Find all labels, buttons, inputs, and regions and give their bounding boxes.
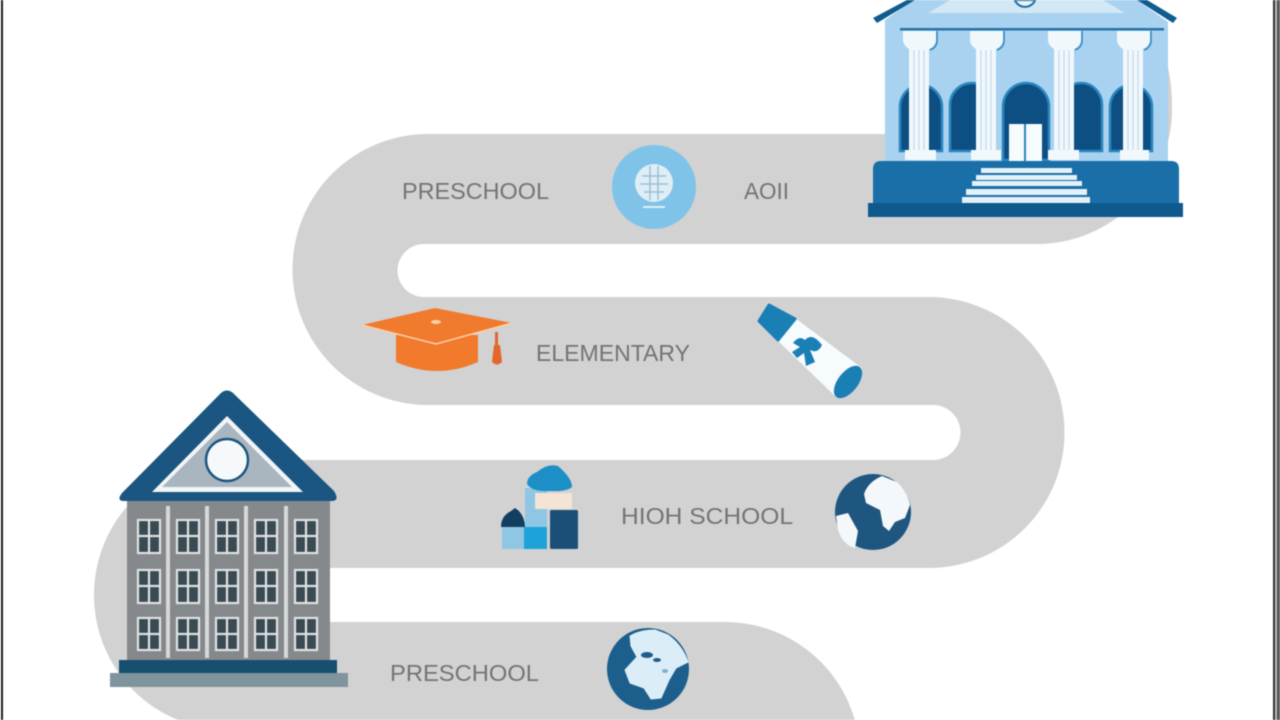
school building	[110, 390, 348, 687]
university wall	[885, 0, 1168, 165]
winding road path	[94, 67, 1172, 720]
school base	[110, 660, 348, 687]
icon: dark globe right	[835, 474, 911, 550]
university building	[868, 0, 1183, 217]
high school label: HIOH SCHOOL	[621, 503, 793, 529]
icon: orange graduation cap	[362, 308, 512, 371]
university arches	[900, 83, 1152, 160]
preschool label bottom: PRESCHOOL	[390, 660, 539, 686]
school body	[127, 500, 330, 660]
university pediment	[873, 0, 1177, 30]
icon: stacked blocks	[501, 465, 578, 549]
icon: diploma scroll	[759, 305, 868, 403]
elementary label: ELEMENTARY	[536, 340, 690, 366]
university columns	[903, 31, 1151, 160]
aoii label: AOII	[744, 178, 789, 204]
school pilasters	[166, 506, 288, 658]
icon: light blue globe badge	[612, 145, 696, 229]
preschool label top: PRESCHOOL	[402, 178, 549, 204]
icon: dark globe bottom	[607, 628, 689, 710]
university steps	[962, 168, 1090, 203]
university podium	[868, 161, 1183, 217]
school windows	[138, 520, 317, 650]
school roof	[119, 390, 337, 501]
university door	[1009, 124, 1042, 161]
